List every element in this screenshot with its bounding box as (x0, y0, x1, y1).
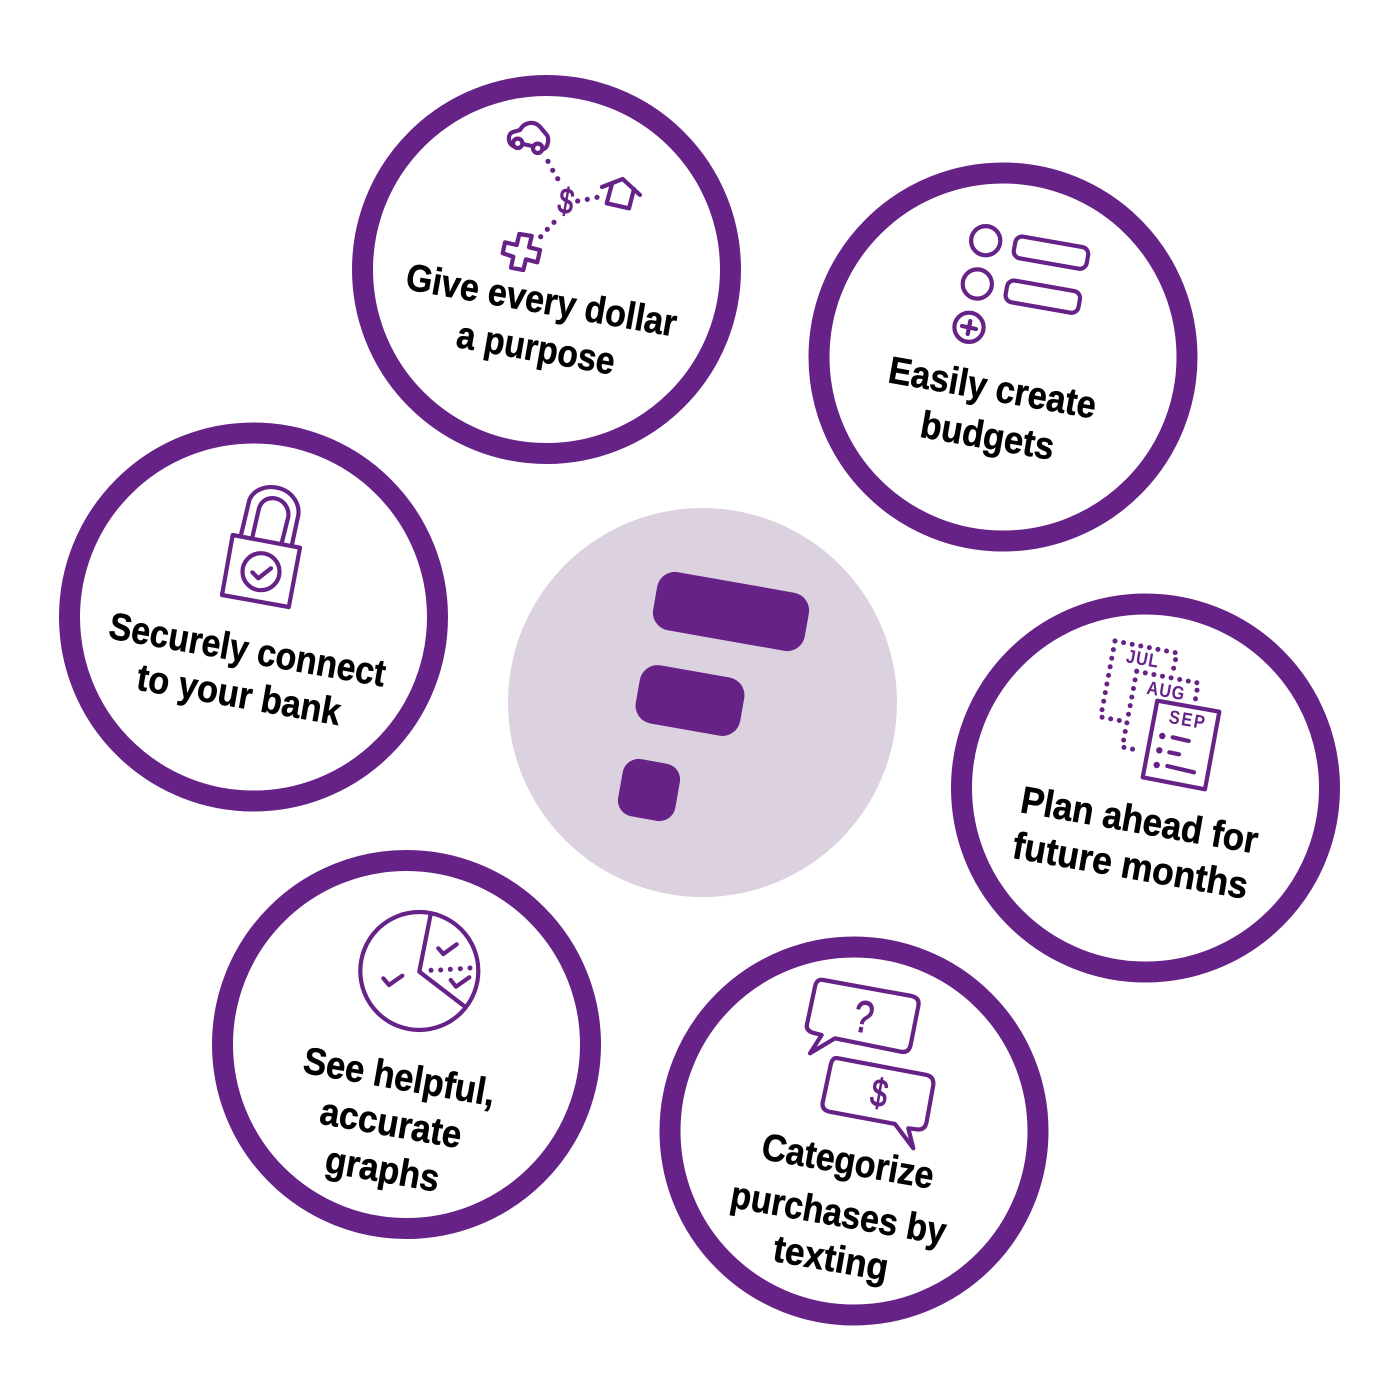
label: Securely connect (106, 605, 389, 696)
label: Give every dollar (403, 257, 680, 345)
icon: speech bubbles: $ (867, 1071, 891, 1116)
panel: give every dollar a purpose (362, 86, 730, 454)
panel: securely connect to your bank (70, 433, 438, 801)
center logo (508, 508, 897, 897)
icon: dollar split to car, house and medical: $ (555, 180, 577, 222)
label: Easily create (885, 350, 1099, 427)
label: to your bank (134, 657, 345, 734)
icon: monthly calendar pages: JUL (1125, 645, 1161, 672)
icon: dollar split to car, house and medical (503, 123, 640, 270)
label: a purpose (453, 314, 618, 384)
label: texting (770, 1228, 892, 1290)
label: accurate (317, 1091, 465, 1157)
panel: see helpful accurate graphs (222, 860, 590, 1228)
label (403, 257, 680, 384)
icon: budget list (954, 226, 1089, 342)
panel: easily create budgets (819, 173, 1187, 541)
label: graphs (322, 1139, 443, 1201)
panel: categorize purchases by texting (670, 947, 1038, 1315)
label: Plan ahead for (1018, 779, 1261, 863)
icon: monthly calendar pages (1101, 641, 1219, 789)
panel: plan ahead for future months (962, 604, 1330, 972)
icon: monthly calendar pages: AUG (1145, 677, 1187, 705)
label: future months (1009, 825, 1251, 908)
icon: pie chart (360, 912, 478, 1030)
icon: speech bubbles: ? (850, 990, 878, 1044)
label: See helpful, (300, 1040, 498, 1115)
label (300, 1040, 498, 1201)
label: budgets (917, 404, 1057, 469)
label: Categorize (759, 1126, 937, 1198)
label (885, 350, 1099, 469)
icon: speech bubbles (807, 980, 933, 1148)
icon: monthly calendar pages: SEP (1167, 706, 1208, 734)
label (1009, 779, 1261, 908)
label (106, 605, 389, 734)
icon: padlock (222, 487, 300, 607)
label: purchases by (727, 1174, 949, 1254)
label (727, 1126, 949, 1290)
